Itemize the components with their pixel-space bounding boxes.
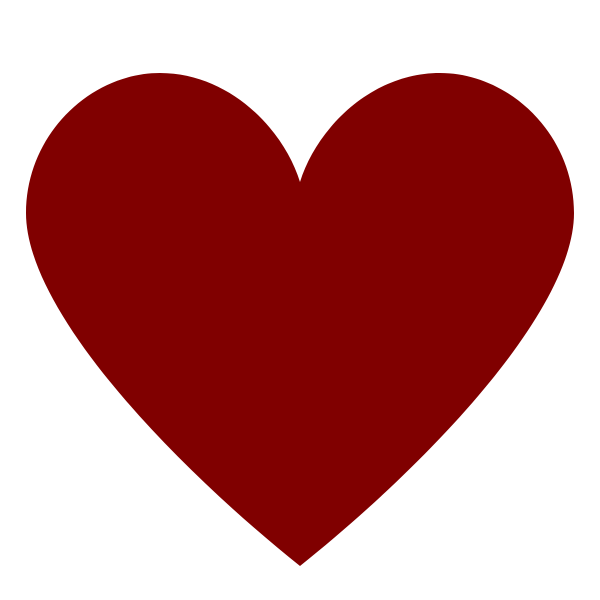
icon: heart: [26, 73, 574, 566]
